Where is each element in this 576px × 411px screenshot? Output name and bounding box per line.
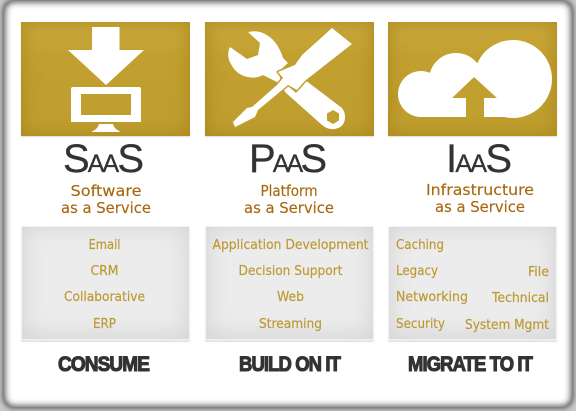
panel: SaaS list [21, 226, 190, 340]
label: build on it: BUILD ON IT [239, 353, 341, 376]
list: PaaS items [212, 238, 368, 332]
list: IaaS items right: System Mgmt [465, 318, 549, 333]
subtitle: PaaS [244, 182, 334, 217]
subtitle: SaaS: Software [70, 182, 142, 200]
subtitle: IaaS [426, 181, 534, 216]
panel: SaaS icon [21, 22, 190, 136]
icon: cloud upload [398, 40, 552, 118]
subtitle: SaaS: as a Service [61, 199, 151, 217]
label: migrate to it: MIGRATE TO IT [408, 353, 533, 376]
list: SaaS items: Collaborative [64, 290, 145, 305]
list: IaaS items right: Technical [491, 291, 549, 306]
label: consume: CONSUME [58, 353, 150, 376]
list: IaaS items right: File [528, 265, 549, 280]
panel: IaaS icon [388, 22, 557, 136]
panel: IaaS list [388, 226, 557, 340]
icon: download arrow [68, 27, 144, 85]
heading: SaaS: SAAS [63, 137, 144, 181]
list: IaaS items left: Caching [396, 238, 444, 253]
list: SaaS items: CRM [90, 264, 118, 279]
panel: PaaS list [205, 226, 374, 340]
subtitle: PaaS: as a Service [244, 199, 334, 217]
list: PaaS items: Application Development [212, 238, 368, 253]
list: PaaS items: Decision Support [238, 264, 342, 279]
panel: PaaS icon [205, 22, 374, 136]
icon: screwdriver [233, 28, 352, 127]
list: PaaS items: Web [277, 290, 304, 305]
list: IaaS items left: Networking [396, 290, 468, 305]
subtitle: IaaS: as a Service [435, 198, 525, 216]
list: PaaS items: Streaming [259, 317, 322, 332]
subtitle: IaaS: Infrastructure [426, 181, 534, 199]
icon: monitor [71, 87, 141, 132]
list: IaaS items right [465, 265, 549, 333]
heading: PaaS: PAAS [249, 137, 327, 181]
list: SaaS items: Email [88, 238, 120, 253]
list: IaaS items left [396, 238, 468, 332]
list: SaaS items: ERP [93, 317, 116, 332]
subtitle: SaaS [61, 182, 151, 217]
heading: IaaS: IAAS [446, 137, 512, 181]
icon: wrench [228, 31, 345, 129]
subtitle: PaaS: Platform [260, 182, 318, 200]
list: IaaS items left: Security [396, 317, 445, 332]
list: SaaS items [64, 238, 145, 332]
list: IaaS items left: Legacy [396, 264, 438, 279]
